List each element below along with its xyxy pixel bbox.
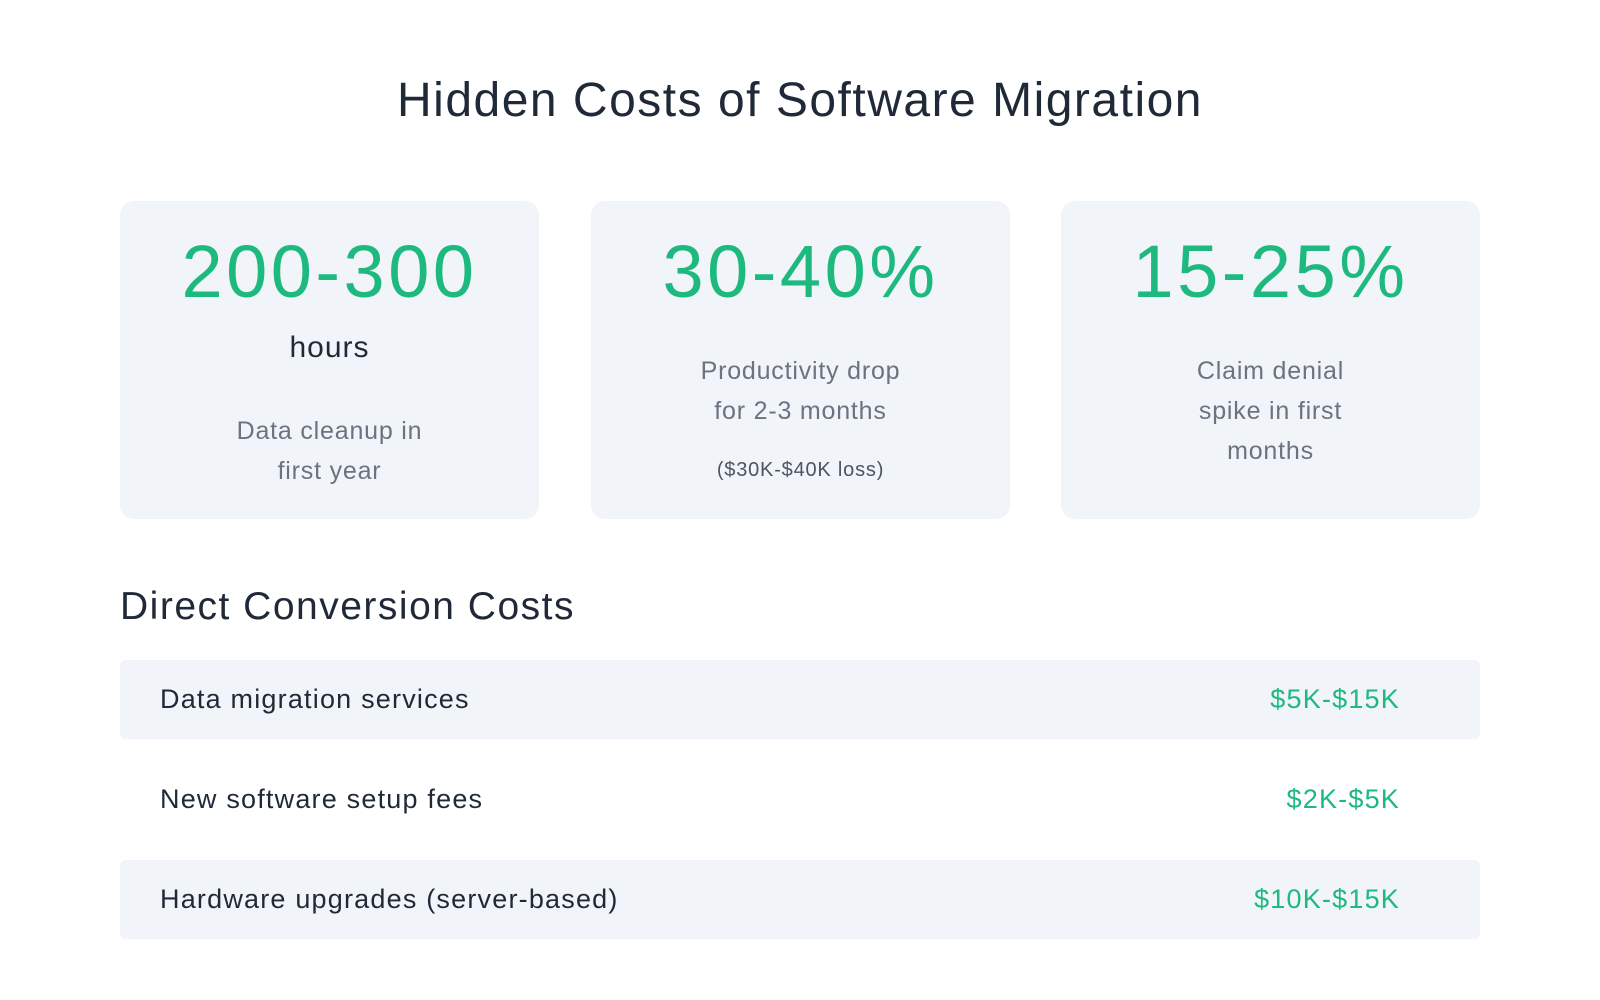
description: Productivity drop bbox=[701, 357, 900, 385]
description: Claim denial bbox=[1197, 357, 1344, 385]
stat: 200-300: 200-300 bbox=[181, 230, 478, 313]
description: Data cleanup in bbox=[237, 417, 422, 445]
row: setup fees: $2K-$5K bbox=[1287, 784, 1400, 814]
panel: claim denial bbox=[1061, 201, 1480, 519]
section heading: Direct Conversion Costs bbox=[120, 585, 575, 628]
panel: data cleanup bbox=[120, 201, 539, 519]
stat: 30-40%: 30-40% bbox=[662, 230, 939, 313]
panel: productivity drop bbox=[591, 201, 1010, 519]
description: months bbox=[1227, 437, 1314, 465]
description: for 2-3 months bbox=[714, 397, 887, 425]
row: setup fees bbox=[160, 784, 1400, 814]
row: setup fees: New software setup fees bbox=[160, 784, 483, 814]
description bbox=[237, 417, 422, 485]
row: hardware: Hardware upgrades (server-based) bbox=[160, 884, 619, 914]
description: first year bbox=[278, 457, 381, 485]
description: spike in first bbox=[1199, 397, 1342, 425]
row: hardware: $10K-$15K bbox=[1254, 884, 1400, 914]
row: data migration: Data migration services bbox=[160, 684, 470, 714]
description bbox=[1197, 357, 1344, 465]
unit: hours: hours bbox=[289, 331, 370, 364]
row: hardware bbox=[120, 860, 1480, 939]
note: loss: ($30K-$40K loss) bbox=[717, 459, 884, 481]
row: data migration: $5K-$15K bbox=[1270, 684, 1400, 714]
stat: 15-25%: 15-25% bbox=[1132, 230, 1409, 313]
description bbox=[701, 357, 900, 425]
row: data migration bbox=[120, 660, 1480, 739]
title: Hidden Costs of Software Migration bbox=[397, 74, 1203, 127]
